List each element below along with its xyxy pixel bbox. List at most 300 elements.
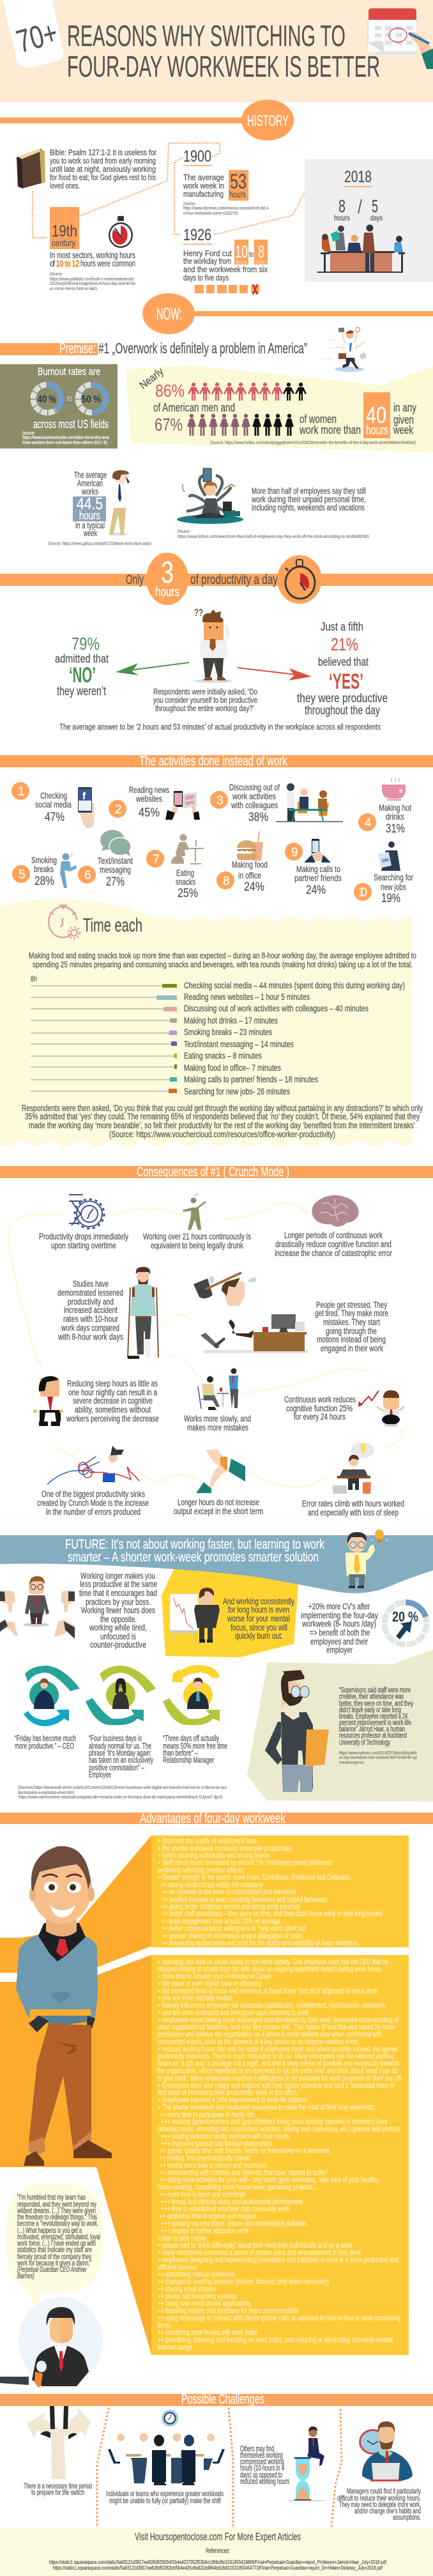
1900 milestone: work week in [183, 181, 224, 190]
panel: advantages list part 2: + Employees reported a 24% improvement in work-life balance [158, 2096, 307, 2104]
footer: Visit Hoursopentoclose.com For More Expert Articles [135, 2531, 301, 2543]
panel: 2018 [305, 159, 433, 282]
callout: 21 percent said yes: throughout the day [305, 704, 380, 717]
activity 2: reading news websites: Reading news [129, 785, 169, 795]
section heading: activities done instead of work: The activities done instead of work [139, 754, 287, 769]
activity 2: reading news websites: 45% [139, 806, 160, 820]
panel: advantages list part 2: ++ having more time to restore and reconnect [160, 2161, 266, 2170]
panel: share working more than 40 hours [126, 365, 433, 452]
activity 5: smoking breaks: breaks [34, 864, 54, 874]
consequence: errors from tangled cable: in the number of errors produced [46, 1507, 141, 1517]
callout: 21 percent said yes: 21% [331, 634, 358, 654]
challenge: preparation time: to prepare for the switch [31, 2488, 84, 2497]
text: 19th century working hours: of [50, 259, 55, 268]
panel: advantages list part 2: ++ additional time to explore and imagine: [160, 2212, 257, 2221]
panel: share working more than 40 hours: 86% [155, 381, 185, 401]
testimonial 2: employee: “Four business days is [89, 1733, 142, 1743]
chart: 40 percent ring [33, 385, 61, 413]
activity 3: discussing out of work activities: with colleagues [231, 800, 278, 810]
activity 1: checking social media [11, 782, 94, 828]
text: quote: didn’t leave early or take long [339, 1706, 401, 1714]
panel: share working more than 40 hours: work more than [299, 424, 361, 436]
activity 8: making food in office: 24% [244, 880, 264, 894]
text: working longer: working while tired, [89, 1623, 147, 1632]
activity 5: smoking breaks: 28% [34, 875, 54, 888]
19th century box [50, 207, 79, 249]
section heading: history [0, 100, 294, 141]
testimonial 3: relationship manager: Relationship Manager [163, 1755, 214, 1765]
sources: testimonials: ductivitatea-a-explodat-vineri.html [18, 1791, 74, 1795]
panel: advantages list part 1: ++ better communication: willingness to ‘help each other out’ [162, 1924, 307, 1933]
panel: advantages list part 2: + more time to Develop your Professional Career [158, 1972, 271, 1981]
text: bible psalm: Bible: Psalm 127:1-2 It is useless for [50, 148, 157, 157]
panel: advantages list part 1: ++ positive increase in team creativity behaviors and helpful behaviors [162, 1895, 327, 1904]
consequence: reduced sleep: severe decrease in cognitive [73, 1396, 153, 1406]
1926 milestone: and the workweek from six [183, 264, 268, 274]
panel: advantages list part 2: + you are more mentally rested. [158, 1993, 232, 2002]
banner: future: FUTURE: It’s not about working faster, but learning to work [65, 1537, 324, 1552]
activity 7: eating snacks: Eating [176, 868, 194, 878]
callout: CEO speech bubble: work force. (...) I have ended up with [17, 2239, 96, 2248]
panel: advantages list part 1: ++ team engagement rose around 20% on average. [162, 1917, 282, 1926]
1900 milestone: 1900 [183, 148, 211, 165]
text: 20 percent more CVs: employees and their [310, 1637, 368, 1646]
panel: advantages list part 1: + improved the quality of employee’s lives [158, 1836, 257, 1845]
panel: advantages list part 2: + help to save money [158, 2234, 206, 2242]
consequence: reduced sleep: ability, sometimes without [75, 1405, 151, 1414]
section heading: consequences: Consequences of #1 ( Crunch Mode ) [137, 1165, 289, 1179]
stat: average American works 44.5 hours: week [83, 528, 97, 538]
challenge: compressed working hours: compressed working [240, 2457, 284, 2466]
activity 6: text and instant messaging: 6 [84, 869, 91, 882]
pictogram: men [188, 383, 307, 401]
consequence: continuous work: Continuous work reduces [284, 1395, 356, 1404]
icon: bible [17, 149, 45, 188]
panel: share working more than 40 hours: of women [300, 413, 337, 425]
panel: advantages list part 2: ++ sharing email inboxes [158, 2284, 216, 2293]
panel: advantages list part 1: + better planning individually and among teams [158, 1851, 270, 1860]
consequence: productivity drops: upon starting overtime [51, 1241, 116, 1250]
panel: advantages list part 2: +++ seeking out new travel, leisure and consumption activities [161, 2219, 307, 2228]
sources: testimonials [18, 1786, 227, 1800]
1926 milestone: hours [236, 259, 247, 265]
panel: supervisor quote: ur-day-workweek-new-zealand.html?smid=fb-nyt [339, 1756, 417, 1760]
illustration: smiling presenter [16, 1846, 112, 2166]
consequence: longer hours and wristwatch: output except in the short term [174, 1506, 263, 1516]
section heading: history: HISTORY [247, 112, 289, 130]
activity 4: making hot drinks [358, 778, 411, 836]
activity 1: checking social media: 1 [18, 785, 25, 799]
panel: advantages list part 2: home-cooking, completing more house-work, gardening projects... [158, 2182, 317, 2191]
consequence: continuous work: for every 24 hours [294, 1412, 346, 1422]
stat: average American works 44.5 hours: 44.5 [77, 494, 103, 513]
panel: advantages list part 2 [151, 1955, 409, 2355]
challenge: preparation time [24, 2406, 92, 2497]
chart: minutes lost of the 8 hour day: Smoking breaks – 23 minutes [184, 1027, 272, 1037]
chart: minutes lost of the 8 hour day: Discussing out of work activities with colleagues – 40 minutes [184, 1004, 368, 1013]
1926 milestone: 8 [258, 242, 264, 261]
stat: average American works 44.5 hours: in a typical [75, 521, 105, 530]
text: 19th century working hours: 10 to 12 [56, 259, 79, 268]
panel: 2018: 2018 [344, 168, 372, 186]
text: survey question: throughout the entire working day?’ [155, 703, 254, 713]
chart: minutes lost of the 8 hour day: Reading news websites – 1 hour 5 minutes [184, 992, 310, 1002]
panel: supervisor quote [247, 1650, 433, 1802]
callout: CEO speech bubble [6, 2184, 103, 2324]
text: unpaid personal time: including nights, weekends and vacations [252, 503, 365, 512]
panel: advantages list part 2: ++ installing instant chat functions for team communication [158, 2306, 299, 2315]
callout: 79 percent said no: they weren’t [57, 685, 107, 698]
panel: burnout rates: 40 % [38, 394, 56, 405]
panel: 2018: 5 [372, 196, 378, 216]
consequence: people get stressed: People get stressed. They [316, 1300, 387, 1310]
illustration: office team at desk [317, 225, 405, 273]
panel: advantages list part 1: ++ greater sharing of information and/or delegation of tasks. [162, 1931, 304, 1940]
activity 9: making calls to partner and friends [285, 839, 342, 897]
activity 6: text and instant messaging: Text/instant [98, 855, 133, 866]
icon: stopwatch [109, 216, 133, 248]
section heading: activities done instead of work [0, 754, 433, 769]
section heading: advantages [0, 1811, 433, 1826]
text: 19th century working hours: In most sectors, working hours [50, 250, 135, 260]
source: nbcnews: 0-hour-workweek-come-n192276) [183, 211, 238, 216]
panel: advantages list part 1 [151, 1836, 409, 1947]
panel: advantages list part 2: +++ improved spousal and familial relationships. [161, 2139, 273, 2148]
activity 10: searching for new jobs: 19% [381, 892, 400, 905]
text: mental focus: for long hours is even [228, 1605, 289, 1614]
consequence: errors from tangled cable [37, 1446, 149, 1517]
chart: minutes lost of the 8 hour day: Making hot drinks – 17 minutes [184, 1016, 278, 1025]
text: working longer: time that it encourages bad [79, 1588, 157, 1598]
text: quote [339, 1687, 413, 1747]
consequence: cognitive function brain [275, 1195, 392, 1258]
testimonial 3: relationship manager: “Three days off actually [163, 1733, 219, 1743]
activity 1: checking social media: 47% [45, 811, 65, 824]
banner: only 3 hours of productivity: 3 [161, 556, 174, 590]
1926 milestone: 1926 [183, 226, 211, 244]
testimonial 2: employee: already normal for us. The [89, 1741, 151, 1751]
section heading: advantages: Advantages of four-day workweek [140, 1811, 285, 1826]
text: working longer: practices by your boss. [86, 1597, 151, 1607]
consequence: errors from tangled cable: One of the biggest productivity sinks [42, 1489, 145, 1499]
timeline dotted connectors [33, 143, 338, 238]
arrow: to yes [238, 668, 312, 680]
illustration: angry man smashing desk [194, 1273, 308, 1353]
challenge: managers reducing hours [337, 2421, 421, 2522]
chart: 20 percent ring [384, 1602, 427, 1644]
text: working longer: unfocused is [100, 1632, 136, 1641]
challenge: compressed working hours: themselves working [240, 2451, 283, 2460]
activity 2: reading news websites [109, 785, 200, 820]
panel: time each: Time each [83, 915, 142, 936]
activity 5: smoking breaks: 5 [19, 868, 26, 882]
icon: calendar and hand [367, 8, 433, 69]
chart: minutes lost of the 8 hour day: Making calls to partner/ friends – 18 minutes [184, 1075, 318, 1084]
callout: CEO speech bubble: (...) What happens is you get a [17, 2226, 82, 2235]
section heading: possible challenges: Possible Challenges [181, 2392, 264, 2407]
illustration: bearded man with folder [265, 1670, 329, 1792]
icon: stopwatch [277, 555, 322, 604]
panel: 2018: hours [334, 213, 350, 222]
challenge: compressed working hours: days) as opposed to [240, 2471, 282, 2480]
banner: only 3 hours of productivity [0, 553, 433, 605]
consequence: works more slowly: Works more slowly, and [184, 1414, 251, 1423]
text: working longer: the opposite. [100, 1614, 137, 1624]
footer [0, 2528, 433, 2576]
activity 3: discussing out of work activities [210, 782, 343, 824]
callout: CEO speech bubble: statistics that indicate my staff are [17, 2245, 92, 2254]
testimonial 1: CEO: “Friday has become much [15, 1733, 76, 1743]
panel: advantages list part 2: efficient manner: [158, 2262, 198, 2271]
consequence: studies on accidents: with 8-hour work days [57, 1332, 123, 1342]
panel: advantages list part 1: wellbeing reflecting positive effects) [157, 1866, 245, 1874]
title [67, 19, 380, 83]
testimonial 3: relationship manager: than before” – [163, 1748, 199, 1758]
callout: CEO speech bubble: motivated, energized, stimulated, loyal [17, 2232, 100, 2241]
activity 1: checking social media: f [82, 791, 86, 802]
19th century box: 19th [52, 222, 77, 240]
consequence: reduced sleep: workers perceiving the decrease [66, 1414, 159, 1423]
activity 10: searching for new jobs: new jobs [381, 882, 406, 892]
1926 milestone: 10 [235, 242, 248, 261]
premise heading: Premise: [59, 340, 96, 356]
chart: minutes lost of the 8 hour day: Searching for new jobs- 26 minutes [184, 1087, 290, 1096]
text: unpaid personal time: More than half of employees say they still [252, 486, 366, 496]
panel: advantages list part 2: ++ combining meal breaks with work tasks [158, 2328, 257, 2337]
consequence: longer hours and wristwatch [174, 1449, 263, 1516]
panel: advantages list part 2: ++ automating manual processes [158, 2270, 235, 2279]
text: 20 percent more CVs [301, 1602, 378, 1655]
text: mental focus: worse for your mental [227, 1614, 290, 1623]
activity 7: eating snacks: snacks [176, 877, 195, 887]
illustration: CEO with microphone [0, 2297, 103, 2388]
testimonial 1: CEO: more productive.” – CEO [15, 1741, 74, 1751]
panel: advantages list part 2: ++ using new smart-phone applications [158, 2299, 251, 2308]
consequence: works more slowly: makes more mistakes [187, 1423, 248, 1432]
source: politifact: ur-come-henry-ford-or-lab/) [50, 287, 97, 291]
panel: burnout rates: https://www.businessinsider.com/labor-force-why-ame [22, 436, 109, 440]
activity 3: discussing out of work activities: work activities [232, 791, 276, 801]
orange background behind presenter [0, 1836, 151, 2354]
panel: burnout rates: Burnout rates are [38, 365, 100, 378]
text: 20 percent more CVs: implementing the four-day [301, 1611, 378, 1620]
activity 1: checking social media: Checking [40, 790, 67, 801]
challenge: preparation time: There is a necessary time period [24, 2481, 92, 2490]
text: working longer: less productive at the same [80, 1579, 157, 1589]
panel: share working more than 40 hours: week [393, 424, 414, 436]
illustration: tired man shrugging [33, 1376, 63, 1426]
panel: advantages list part 2: internet usage. [158, 2342, 194, 2351]
activity 10: searching for new jobs: JOBS [381, 858, 390, 864]
activity 8: making food in office [216, 831, 268, 894]
illustration: overworked man running [321, 327, 367, 372]
activity 4: making hot drinks: 31% [386, 822, 405, 836]
panel: burnout rates: 50 % [82, 394, 101, 405]
banner: future [0, 1535, 433, 1593]
section heading: now [142, 293, 433, 334]
activity 5: smoking breaks [12, 854, 77, 888]
activity 10: searching for new jobs: Searching for [374, 872, 413, 882]
chart: minutes lost of the 8 hour day: Text/instant messaging – 14 minutes [184, 1039, 294, 1049]
activity 5: smoking breaks: Smoking [31, 855, 57, 865]
1926 milestone: Henry Ford cut [183, 249, 232, 258]
challenge: compressed working hours: Others may find [240, 2444, 274, 2453]
1900 milestone: hours [229, 189, 246, 199]
chart: minutes lost of the 8 hour day: 8h [31, 974, 37, 983]
consequence: legally drunk: equivalent to being legally drunk [151, 1241, 243, 1250]
1926 milestone: the workday from [183, 256, 231, 266]
consequence: studies on accidents: productivity and [68, 1297, 114, 1307]
callout: CEO speech bubble: Barnes) [17, 2271, 34, 2280]
premise heading [0, 340, 307, 356]
panel: advantages list part 2: time) [158, 2320, 171, 2329]
callout: 79 percent said no: ‘NO’ [69, 663, 96, 687]
activity 10: searching for new jobs: 10 [358, 886, 367, 900]
consequence: productivity drops [39, 1195, 128, 1250]
consequence: people get stressed: mistakes. They start [323, 1317, 380, 1327]
pictogram: women [187, 414, 294, 436]
dotted yellow connector path [8, 1203, 402, 1487]
text: bible psalm: until late at night, anxiously working [50, 165, 156, 174]
banner: only 3 hours of productivity: Only [126, 572, 144, 587]
premise heading: #1 „Overwork is definitely a problem in America” [98, 340, 307, 356]
callout: CEO speech bubble: wildest dreams. (...) They were given [17, 2206, 96, 2215]
consequence: continuous work [284, 1390, 404, 1427]
19th century box: century [52, 238, 75, 248]
chart: minutes lost of the 8 hour day: Making food in office– 7 minutes [184, 1063, 281, 1073]
panel: advantages list part 2: +++ time to established volunteer and community work [161, 2204, 290, 2213]
source: politifact: 2015/sep/09/viral-image/does-8-hour-day-and-40-ho [50, 282, 135, 286]
activity 2: reading news websites: websites [135, 793, 162, 804]
text: 20 percent more CVs: employer [326, 1645, 353, 1655]
callout: CEO speech bubble: become a "revolutionary way to work. [17, 2219, 98, 2228]
testimonial 2: employee [86, 1666, 156, 1779]
section heading: possible challenges [0, 2392, 433, 2407]
consequence: reduced sleep [66, 1379, 159, 1423]
chart: minutes lost of the 8 hour day [31, 974, 405, 1096]
text: working longer [79, 1571, 157, 1650]
panel: share working more than 40 hours: 67% [155, 415, 183, 434]
1900 milestone: The average [183, 172, 224, 182]
title badge: 70+: 70+ [13, 15, 61, 59]
testimonial 3: relationship manager: means 50% more free time [163, 1741, 227, 1751]
panel: advantages list part 2: ++ changes to meeting behavior (shorter, focused, only when necessary) [158, 2277, 329, 2286]
1926 milestone [183, 226, 268, 282]
callout: 21 percent said yes: believed that [318, 656, 368, 668]
panel: 2018: 8 [338, 196, 346, 216]
callout: 21 percent said yes: Just a fifth [321, 620, 363, 633]
consequence: reduced sleep: Reducing sleep hours as little as [67, 1379, 158, 1388]
illustration: smart man with light bulb [346, 1524, 388, 1588]
challenge: greater workloads meeting: might be unable to fully (or partially) make the shift [109, 2496, 221, 2505]
text: 20 percent more CVs: => benefit of both the [310, 1628, 370, 1637]
text: distractions paragraph: (Source: https://www.vouchercloud.com/resources/office-worker-productivity) [109, 1130, 335, 1139]
callout: CEO speech bubble: "I’m humbled that my team has [17, 2193, 86, 2202]
section heading: now: NOW: [156, 304, 182, 323]
activity 9: making calls to partner and friends: 9 [291, 846, 298, 859]
panel: advantages list part 2: + people had to ‘think differently’ about their work both individually and as a team [158, 2241, 353, 2250]
illustration: man surrounded by thumbs down [0, 1576, 75, 1639]
illustration: confused man [194, 608, 232, 683]
consequence: studies on accidents: Studies have [73, 1279, 109, 1289]
1926 milestone: hours [255, 259, 267, 265]
icon: stopwatch with gear [49, 905, 80, 939]
consequence: cognitive function brain: drastically reduce cognitive function and [275, 1239, 391, 1249]
stat: average American works 44.5 hours: hours [79, 509, 100, 522]
1926 milestone: to [249, 250, 254, 259]
stat: average American works 44.5 hours [73, 470, 107, 538]
activity 7: eating snacks: 25% [178, 887, 198, 900]
panel: burnout rates: to [67, 394, 72, 403]
1900 milestone: 53 [230, 170, 247, 193]
panel: burnout rates: across most US fields [33, 418, 109, 431]
activity 6: text and instant messaging: 27% [106, 875, 125, 889]
panel: advantages list part 2: +++ engage in further education work [161, 2226, 249, 2235]
panel: time each [0, 900, 423, 1146]
challenge: greater workloads meeting: Individuals or teams who experience greater workloads [106, 2489, 224, 2498]
source: hrdive: (Source: [178, 530, 190, 534]
text: mental focus: focus, since you will [231, 1623, 287, 1632]
text: unpaid personal time: work during their unpaid personal time, [251, 494, 366, 504]
panel: advantages list part 1: + Greater strength of the teams: more Hope, Confidence, Resilience and Optimism: [158, 1873, 351, 1882]
panel: yellow mental focus [162, 1565, 299, 1657]
callout: CEO speech bubble: work for because it gives a damn." [17, 2258, 91, 2267]
panel: advantages list part 2: +++ formal and informal study and professional development. [161, 2197, 304, 2206]
text: working longer: Working fewer hours does [81, 1606, 155, 1615]
source: nbcnews [183, 202, 268, 216]
source: nbcnews: (source: [183, 202, 196, 206]
illustration: confused man: ?? [194, 608, 203, 618]
testimonial 2: employee: has taken on an exclusively [89, 1755, 153, 1765]
panel: burnout rates: rican-workers-burn-out-faster-than-others-2017-6) [22, 441, 107, 445]
text: 20 percent more CVs: workweek (8- hours /day) [301, 1619, 376, 1629]
activity 9: making calls to partner and friends: Making calls to [296, 864, 340, 874]
section heading: consequences [0, 1165, 433, 1179]
text: bible psalm: you to work so hard from early morning [50, 157, 156, 165]
testimonial 2: employee: phrase ‘It’s Monday again’ [89, 1748, 151, 1758]
panel: share working more than 40 hours: 40 [366, 402, 386, 428]
stat: average American works 44.5 hours: American [77, 479, 103, 488]
consequence: people get stressed: going through the [326, 1326, 377, 1336]
testimonial 2: employee: positive connotation” – [89, 1763, 145, 1772]
consequence: legally drunk [143, 1193, 251, 1250]
text: 19th century working hours [50, 250, 135, 268]
consequence: errors from tangled cable: created by Crunch Mode is the increase [37, 1498, 149, 1508]
callout: 21 percent said yes: ‘YES’ [329, 670, 363, 694]
source: politifact: (Source: [50, 272, 63, 277]
testimonial 2: employee: Employee [89, 1770, 111, 1779]
text: unpaid personal time [251, 486, 366, 512]
consequence: people get stressed [315, 1300, 388, 1353]
activity 6: text and instant messaging [78, 830, 133, 889]
illustration: multitasking man with many arms [177, 468, 243, 524]
callout: CEO speech bubble: (Perpetual Guardian CEO Andrew [17, 2265, 87, 2274]
panel: advantages list part 2: find ways of increasing their productivity while in the office.” [158, 2088, 300, 2097]
text: snack time paragraph [29, 951, 416, 969]
chart: 50 percent ring [78, 385, 106, 413]
challenge: greater workloads meeting [106, 2410, 225, 2505]
source: nbcnews: https://www.nbcnews.com/news/us-news/where-did-4 [183, 206, 268, 211]
source: hrdive [178, 530, 369, 539]
activity 2: reading news websites: 2 [115, 803, 122, 816]
testimonial 3: relationship manager [163, 1665, 227, 1765]
activity 3: discussing out of work activities: 38% [248, 811, 268, 824]
text: working longer: Working longer makes you [80, 1571, 155, 1581]
callout: 21 percent said yes: they were productive [297, 692, 388, 705]
panel: advantages list part 2: ++ reconnecting with hobbies and interests that have ‘started to suffer’. [160, 2168, 329, 2177]
panel: burnout rates: (source: [22, 431, 35, 436]
challenge: compressed working hours: reduced working hours [240, 2477, 289, 2486]
